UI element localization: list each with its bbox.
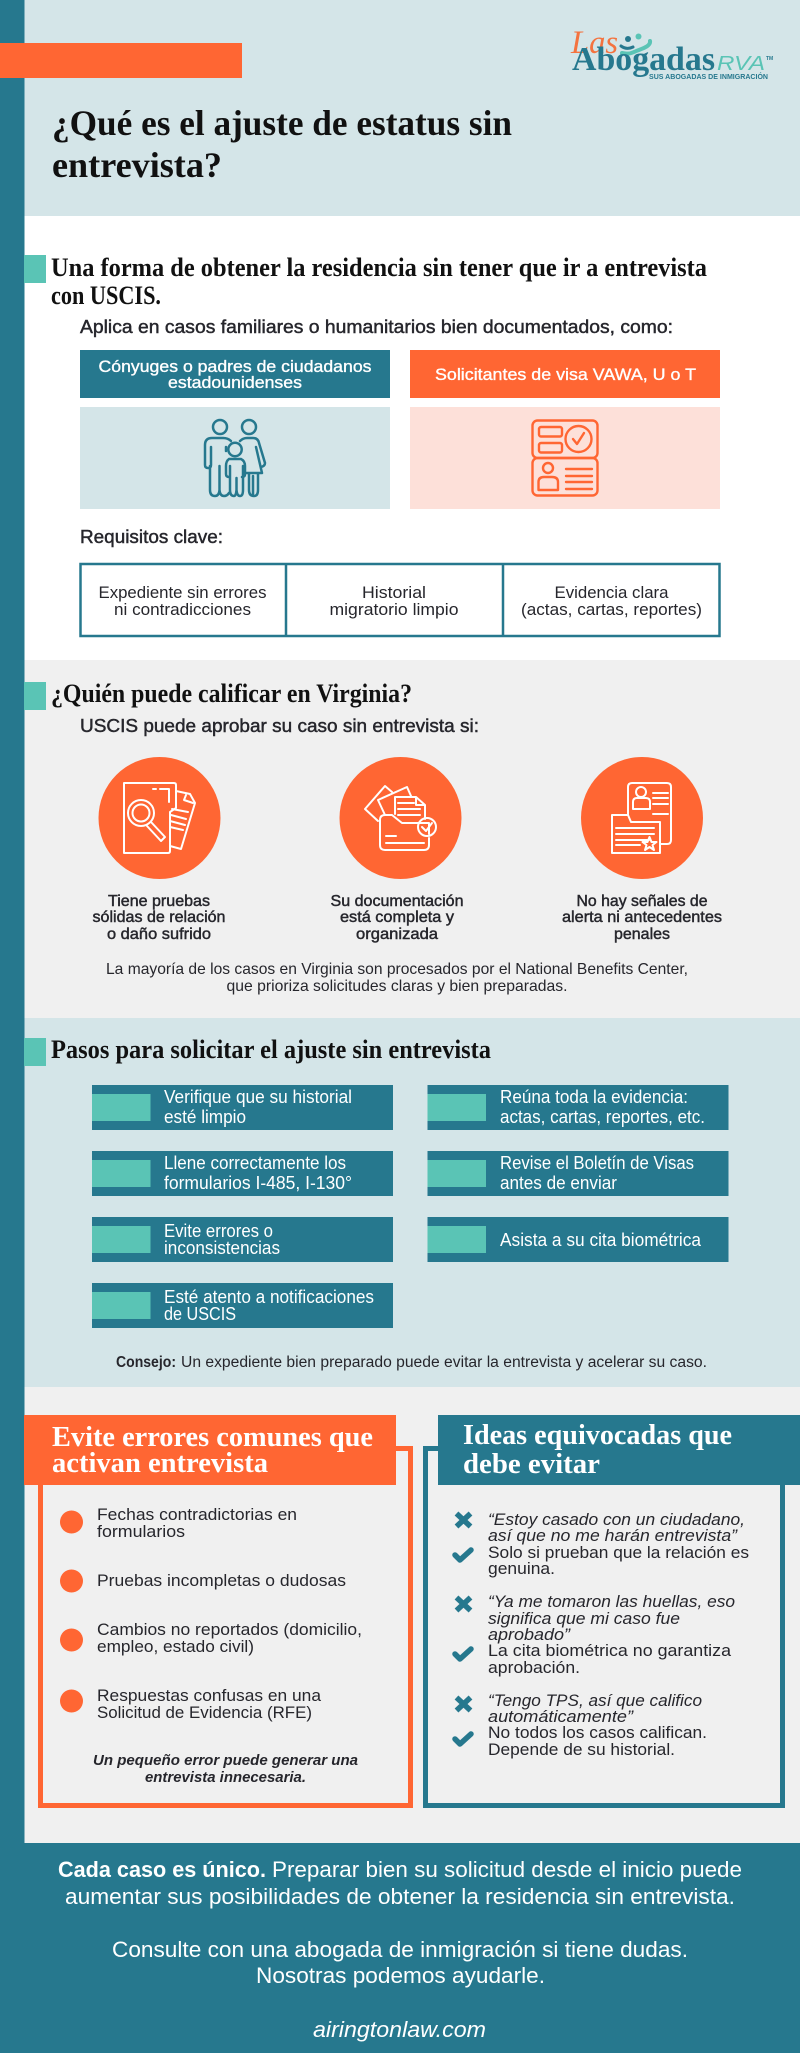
step: evite: Evite errores o xyxy=(164,1221,273,1241)
heading: una forma xyxy=(51,253,707,310)
step: verifique: Verifique que su historial xyxy=(164,1087,352,1107)
myth 1 xyxy=(455,1511,749,1578)
step: revise xyxy=(428,1151,728,1196)
item: cambios: empleo, estado civil) xyxy=(97,1638,254,1656)
myth 1: “Estoy casado con un ciudadano, xyxy=(488,1511,745,1529)
footer text: cada caso xyxy=(58,1857,742,1909)
logo: Las xyxy=(570,25,618,61)
step: asista: Asista a su cita biométrica xyxy=(500,1230,702,1250)
icon panel: family xyxy=(80,407,390,509)
item: pruebas xyxy=(60,1570,346,1592)
icon: family xyxy=(205,420,265,496)
card: conyuges: estadounidenses xyxy=(168,374,302,392)
heading: una forma: con USCIS. xyxy=(51,281,161,310)
footer text: consulte: Consulte con una abogada de inmigración si tiene dudas. xyxy=(112,1937,688,1962)
myth 1: así que no me harán entrevista” xyxy=(488,1527,739,1545)
panel header: errores: activan entrevista xyxy=(52,1447,268,1479)
section marker xyxy=(24,1038,46,1066)
item: cambios: Cambios no reportados (domicilio, xyxy=(97,1621,362,1639)
icon panel: documents xyxy=(410,407,720,509)
logo: RVA xyxy=(717,53,765,75)
cell: historial: Historial xyxy=(362,583,426,602)
item: cambios xyxy=(60,1621,362,1656)
logo: Abogadas xyxy=(572,41,715,78)
text: requisitos clave: Requisitos clave: xyxy=(80,527,223,547)
heading: una forma: Una forma de obtener la residencia sin tener que ir a entrevista xyxy=(51,253,707,282)
step: revise: Revise el Boletín de Visas xyxy=(500,1153,694,1173)
card: conyuges: Cónyuges o padres de ciudadanos xyxy=(98,358,372,376)
cell: historial: migratorio limpio xyxy=(330,600,458,619)
title: entrevista? xyxy=(52,145,222,185)
cell: evidencia: Evidencia clara xyxy=(554,583,669,602)
tip: consejo: Un expediente bien preparado puede evitar la entrevista y acelerar su caso. xyxy=(181,1354,707,1371)
step: verifique xyxy=(92,1085,393,1130)
note: national benefits center: La mayoría de los casos en Virginia son procesados por el National Benefits Center, xyxy=(106,961,688,978)
step: reuna: actas, cartas, reportes, etc. xyxy=(500,1107,705,1127)
logo: TM xyxy=(766,56,773,62)
myth 1: Solo si prueban que la relación es xyxy=(488,1544,749,1562)
step: llene xyxy=(92,1151,393,1196)
caption: pruebas: o daño sufrido xyxy=(107,926,211,943)
myth 3: “Tengo TPS, así que califico xyxy=(488,1692,702,1710)
icon: id documents xyxy=(532,420,598,496)
panel: qualify background xyxy=(24,660,800,1018)
myth 2: aprobación. xyxy=(488,1659,580,1677)
cell: historial xyxy=(330,583,458,619)
myth 1: genuina. xyxy=(488,1560,555,1578)
step: este atento: Esté atento a notificaciones xyxy=(164,1287,374,1307)
note: national benefits center xyxy=(106,961,688,995)
caption: documentacion: organizada xyxy=(356,926,438,943)
step: llene: Llene correctamente los xyxy=(164,1153,346,1173)
step: reuna xyxy=(428,1085,728,1130)
logo: SUS ABOGADAS DE INMIGRACIÓN xyxy=(649,72,768,81)
myth 2: “Ya me tomaron las huellas, eso xyxy=(488,1593,735,1611)
step: asista xyxy=(428,1217,728,1262)
footer text: consulte: Nosotras podemos ayudarle. xyxy=(256,1963,545,1988)
step: llene: formularios I-485, I-130° xyxy=(164,1173,352,1193)
myth 2: significa que mi caso fue xyxy=(488,1610,680,1628)
footer text: consulte xyxy=(112,1937,688,1988)
logo xyxy=(570,25,773,81)
icon: evidence xyxy=(98,757,220,879)
cell: expediente: Expediente sin errores xyxy=(98,583,266,602)
caption: documentacion: Su documentación xyxy=(330,893,464,910)
step: verifique: esté limpio xyxy=(164,1107,246,1127)
cell: expediente: ni contradicciones xyxy=(114,600,251,619)
card: conyuges xyxy=(80,350,390,398)
myth 3: automáticamente” xyxy=(488,1708,635,1726)
note: pequeno error: Un pequeño error puede generar una xyxy=(93,1752,358,1769)
caption: pruebas: sólidas de relación xyxy=(92,909,226,926)
step: revise: antes de enviar xyxy=(500,1173,617,1193)
cell: evidencia: (actas, cartas, reportes) xyxy=(521,600,702,619)
note: pequeno error: entrevista innecesaria. xyxy=(145,1769,306,1786)
step: este atento: de USCIS xyxy=(164,1304,236,1324)
icon: organized documents xyxy=(340,757,462,879)
myth 3: No todos los casos califican. xyxy=(488,1724,707,1742)
card: vawa xyxy=(410,350,720,398)
step: este atento xyxy=(92,1283,393,1328)
item: fechas: Fechas contradictorias en xyxy=(97,1506,297,1524)
footer text: cada caso: Cada caso es único. xyxy=(58,1857,266,1882)
footer text: website: airingtonlaw.com xyxy=(313,2017,486,2042)
panel: header xyxy=(24,0,800,216)
caption: senales: penales xyxy=(614,926,670,943)
heading: pasos: Pasos para solicitar el ajuste sin entrevista xyxy=(51,1035,491,1064)
footer xyxy=(0,1843,800,2053)
caption: senales xyxy=(562,893,722,943)
panel: errors and myths background xyxy=(24,1387,800,1843)
item: respuestas: Respuestas confusas en una xyxy=(97,1687,322,1705)
icon: clean record xyxy=(581,757,703,879)
tip: consejo: Consejo: xyxy=(116,1354,176,1371)
panel header: ideas: debe evitar xyxy=(463,1448,600,1480)
title: ¿Qué es el ajuste de estatus sin xyxy=(52,103,512,143)
orange accent bar xyxy=(0,43,242,78)
step: reuna: Reúna toda la evidencia: xyxy=(500,1087,688,1107)
footer text: cada caso: Preparar bien su solicitud desde el inicio puede xyxy=(272,1857,742,1882)
cell: expediente xyxy=(98,583,266,619)
heading: quien puede calificar: ¿Quién puede calificar en Virginia? xyxy=(51,679,412,708)
item: respuestas xyxy=(60,1687,322,1722)
panel: steps background xyxy=(24,1018,800,1387)
title xyxy=(52,103,512,185)
caption: documentacion xyxy=(330,893,464,943)
step: evite: inconsistencias xyxy=(164,1238,280,1258)
panel header: errores xyxy=(24,1415,396,1485)
item: respuestas: Solicitud de Evidencia (RFE) xyxy=(97,1704,312,1722)
myth 2: La cita biométrica no garantiza xyxy=(488,1642,732,1660)
myth 2: aprobado” xyxy=(488,1626,572,1644)
cell: evidencia xyxy=(521,583,702,619)
left side bar xyxy=(0,0,24,2053)
myth 3 xyxy=(455,1692,707,1759)
panel header: errores: Evite errores comunes que xyxy=(52,1421,373,1453)
section marker xyxy=(24,255,46,283)
caption: senales: alerta ni antecedentes xyxy=(562,909,722,926)
card: vawa: Solicitantes de visa VAWA, U o T xyxy=(435,366,696,384)
item: pruebas: Pruebas incompletas o dudosas xyxy=(97,1572,346,1590)
section marker xyxy=(24,682,46,710)
myth 3: Depende de su historial. xyxy=(488,1741,675,1759)
caption: pruebas xyxy=(92,893,226,943)
myth 2 xyxy=(455,1593,735,1677)
step: evite xyxy=(92,1217,393,1262)
footer text: cada caso: aumentar sus posibilidades de obtener la residencia sin entrevista. xyxy=(65,1884,735,1909)
text: aplica en casos: Aplica en casos familiares o humanitarios bien documentados, como: xyxy=(80,316,673,337)
caption: senales: No hay señales de xyxy=(576,893,708,910)
text: uscis puede aprobar: USCIS puede aprobar su caso sin entrevista si: xyxy=(80,715,479,736)
panel: errores comunes xyxy=(24,1415,410,1806)
caption: documentacion: está completa y xyxy=(340,909,454,926)
caption: pruebas: Tiene pruebas xyxy=(108,893,210,910)
item: fechas xyxy=(60,1506,297,1541)
note: national benefits center: que prioriza solicitudes claras y bien preparadas. xyxy=(226,978,568,995)
panel: ideas equivocadas xyxy=(426,1415,800,1806)
table: requisitos xyxy=(80,564,720,636)
panel header: ideas: Ideas equivocadas que xyxy=(463,1419,732,1451)
item: fechas: formularios xyxy=(97,1523,185,1541)
panel header: ideas xyxy=(438,1415,800,1485)
note: pequeno error xyxy=(93,1752,358,1786)
